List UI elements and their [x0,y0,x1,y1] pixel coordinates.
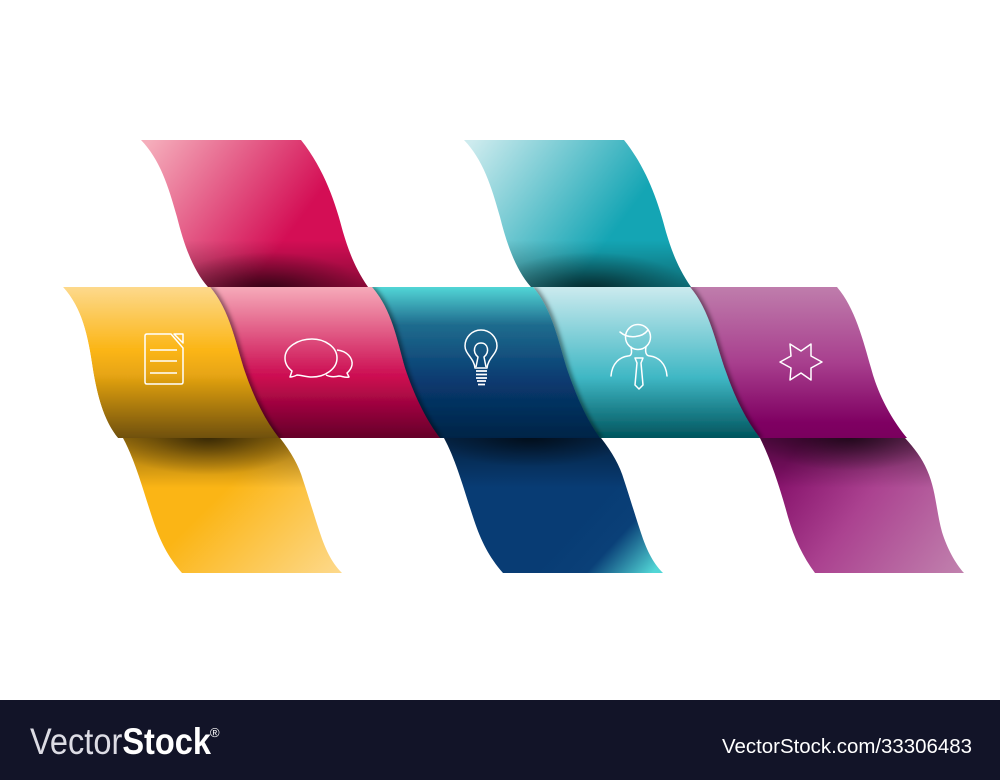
icon: businessman [611,324,667,389]
ribbon: teal upper tail [464,140,691,287]
panel: navy segment [360,287,600,438]
icon: six-point star [780,344,822,380]
logo: VectorStock: VectorStock [30,721,211,762]
ribbon: crimson upper tail [141,140,368,287]
icon: light bulb [465,330,497,384]
icon: speech bubbles [285,339,352,377]
ribbon: purple lower tail [760,438,964,573]
panel: yellow segment [63,287,279,438]
icon: document [145,334,183,384]
panel: teal segment [520,287,760,438]
central ribbon band [63,287,907,438]
ribbon: navy lower tail [444,438,663,573]
panel: purple segment [680,287,907,438]
image id: VectorStock.com/33306483 [722,736,972,758]
panel: crimson segment [200,287,440,438]
footer bar [0,700,1000,780]
ribbon: yellow lower tail [123,438,342,573]
registered mark: ® [210,725,220,740]
